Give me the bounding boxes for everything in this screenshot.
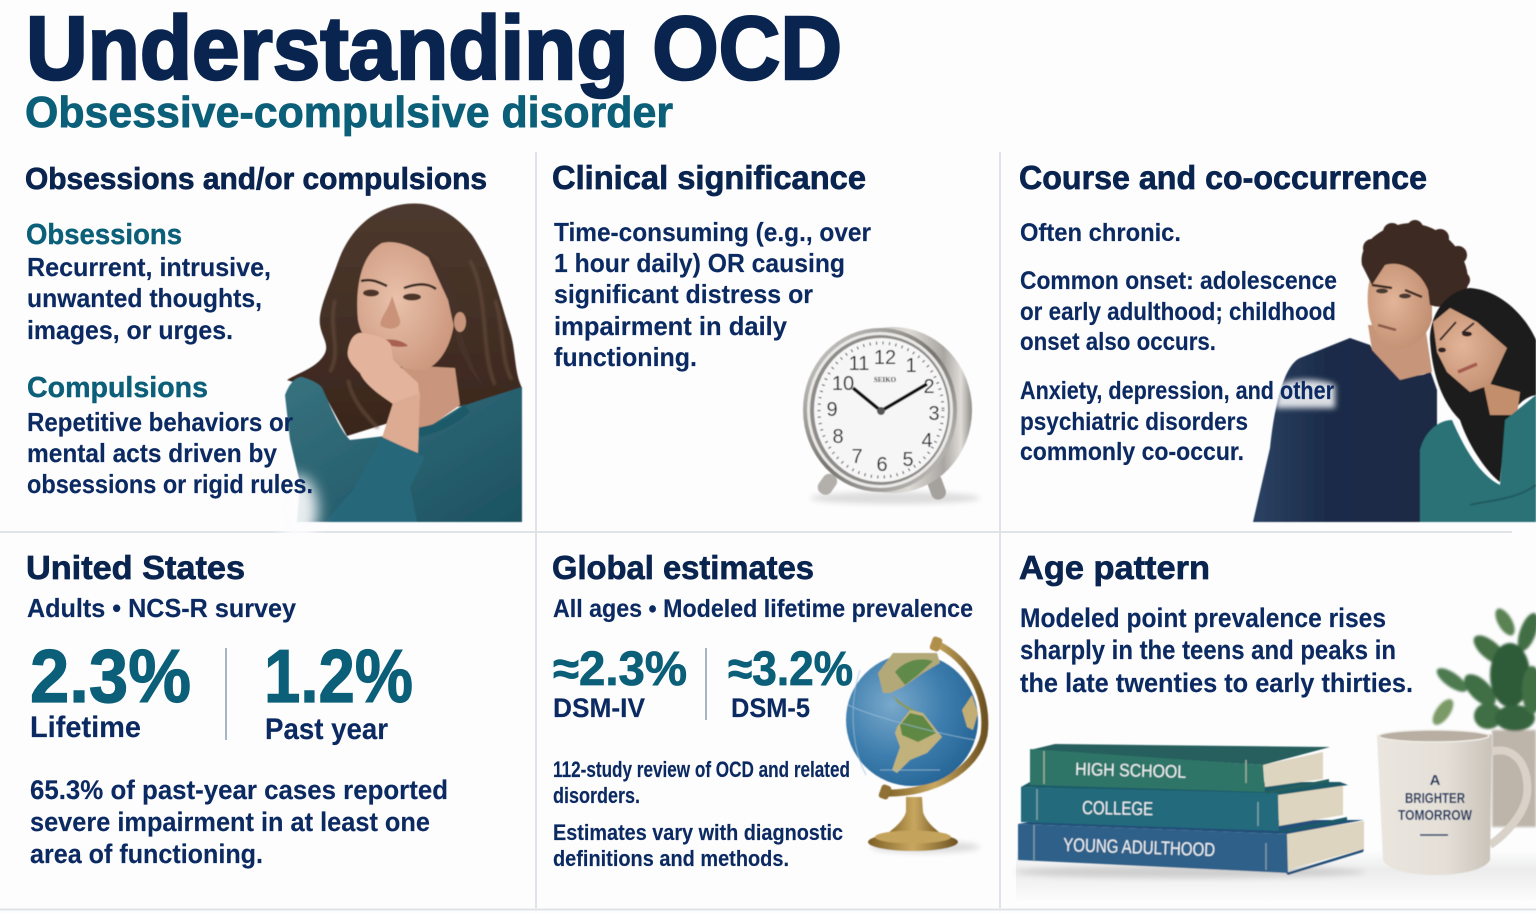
- stat: lifetime prevalence: 2.3%: [30, 634, 191, 718]
- icon: mug: [1377, 730, 1527, 875]
- text block: onset: Common onset: adolescence: [1020, 267, 1337, 295]
- heading: obsessions and compulsions: Obsessions and/or compulsions: [25, 161, 487, 196]
- icon: mug: BRIGHTER: [1405, 790, 1465, 807]
- text block: obsessions definition: Recurrent, intrusive,: [27, 252, 271, 282]
- icon: alarm clock: 6: [876, 454, 888, 476]
- text block: estimate caveat: Estimates vary with diagnostic: [553, 820, 843, 845]
- heading: age pattern: Age pattern: [1019, 549, 1210, 586]
- text block: compulsions definition: mental acts driven by: [27, 438, 277, 468]
- text block: clinical criteria: 1 hour daily) OR causing: [554, 248, 845, 278]
- icon: mug: A: [1430, 772, 1441, 789]
- icon: alarm clock: 8: [832, 426, 844, 448]
- book: young adulthood: YOUNG ADULTHOOD: [1063, 835, 1215, 861]
- icon: alarm clock: 5: [902, 449, 914, 471]
- book: college: [1021, 782, 1348, 833]
- heading: clinical significance: Clinical significance: [552, 159, 866, 196]
- subheading: prevalence type: All ages • Modeled lifetime prevalence: [553, 595, 973, 623]
- text block: compulsions definition: [27, 407, 313, 499]
- text block: obsessions definition: images, or urges.: [27, 315, 233, 345]
- book: young adulthood: [1018, 820, 1364, 875]
- text block: age prevalence: Modeled point prevalence rises: [1020, 603, 1386, 633]
- text block: study review: [553, 757, 850, 808]
- icon: alarm clock: 7: [851, 446, 863, 468]
- panel: global estimates: [552, 549, 985, 871]
- text block: age prevalence: [1020, 603, 1413, 698]
- icon: potted plant: [1429, 606, 1536, 827]
- stat: DSM-IV estimate: DSM-IV: [553, 693, 645, 723]
- text block: estimate caveat: definitions and methods.: [553, 846, 789, 871]
- label: compulsions: Compulsions: [27, 372, 208, 404]
- panel: course and co-occurrence: [1019, 159, 1536, 522]
- text block: chronic course: Often chronic.: [1020, 219, 1181, 247]
- icon: alarm clock: 11: [849, 353, 869, 375]
- panel: age pattern: [1015, 549, 1536, 900]
- stat: past-year prevalence: Past year: [265, 713, 388, 746]
- icon: stacked books: [1015, 744, 1365, 878]
- panel: clinical significance: [552, 159, 980, 504]
- text block: co-occurring disorders: commonly co-occur.: [1020, 438, 1244, 466]
- stat: DSM-IV estimate: ≈2.3%: [553, 643, 687, 696]
- label: obsessions: Obsessions: [26, 219, 182, 251]
- illustration: couple: [1253, 220, 1536, 522]
- icon: alarm clock: 4: [921, 430, 933, 452]
- stat: DSM-IV estimate: [553, 643, 687, 723]
- text block: compulsions definition: obsessions or rigid rules.: [27, 469, 313, 499]
- stat: past-year prevalence: 1.2%: [264, 634, 413, 718]
- heading: course and co-occurrence: Course and co-occurrence: [1019, 159, 1427, 196]
- text block: clinical criteria: significant distress or: [554, 279, 813, 309]
- icon: mug: TOMORROW: [1398, 807, 1473, 824]
- text block: estimate caveat: [553, 820, 843, 871]
- book: college: COLLEGE: [1082, 798, 1153, 820]
- text block: co-occurring disorders: [1020, 377, 1334, 466]
- icon: alarm clock: [803, 327, 980, 504]
- text block: clinical criteria: functioning.: [554, 342, 697, 372]
- table surface: [1016, 850, 1536, 900]
- panel: united states: [26, 549, 448, 869]
- stat: DSM-5 estimate: DSM-5: [731, 693, 810, 723]
- stat: past-year prevalence: [264, 634, 413, 746]
- text block: onset: [1020, 267, 1337, 356]
- heading: united states: United States: [26, 549, 245, 586]
- text block: impairment: [30, 775, 448, 869]
- illustration: worried woman: [278, 204, 522, 544]
- subheading: survey: Adults • NCS-R survey: [27, 593, 297, 623]
- icon: alarm clock: 9: [826, 399, 838, 421]
- text block: clinical criteria: [554, 217, 871, 372]
- text block: compulsions definition: Repetitive behaviors or: [27, 407, 293, 437]
- text block: impairment: area of functioning.: [30, 839, 263, 869]
- icon: alarm clock: 3: [928, 403, 940, 425]
- text block: impairment: severe impairment in at least one: [30, 807, 430, 837]
- stat: DSM-5 estimate: [728, 643, 853, 723]
- text block: age prevalence: sharply in the teens and peaks in: [1020, 635, 1396, 665]
- icon: alarm clock: 2: [923, 376, 935, 398]
- text block: study review: 112-study review of OCD and related: [553, 757, 850, 782]
- text block: obsessions definition: unwanted thoughts,: [27, 283, 262, 313]
- icon: alarm clock: 10: [832, 373, 854, 395]
- text block: clinical criteria: impairment in daily: [554, 311, 788, 341]
- icon: alarm clock: 1: [905, 355, 917, 377]
- title: Understanding OCD: [26, 0, 842, 99]
- book: high school: HIGH SCHOOL: [1075, 759, 1186, 782]
- text block: clinical criteria: Time-consuming (e.g., over: [554, 217, 871, 247]
- text block: study review: disorders.: [553, 783, 640, 808]
- text block: co-occurring disorders: psychiatric disorders: [1020, 408, 1248, 436]
- stat: lifetime prevalence: Lifetime: [30, 711, 141, 744]
- icon: globe: [846, 636, 985, 853]
- subtitle: Obsessive-compulsive disorder: [25, 88, 673, 137]
- text block: co-occurring disorders: Anxiety, depression, and other: [1020, 377, 1334, 405]
- text block: impairment: 65.3% of past-year cases reported: [30, 775, 448, 805]
- text block: onset: onset also occurs.: [1020, 328, 1216, 356]
- heading: global estimates: Global estimates: [552, 549, 814, 586]
- book: high school: [1030, 744, 1330, 794]
- icon: alarm clock: 12: [874, 347, 896, 369]
- stat: DSM-5 estimate: ≈3.2%: [728, 643, 853, 696]
- icon: alarm clock: SEIKO: [874, 376, 897, 384]
- text block: obsessions definition: [27, 252, 271, 345]
- text block: onset: or early adulthood; childhood: [1020, 298, 1336, 326]
- text block: age prevalence: the late twenties to early thirties.: [1020, 668, 1413, 698]
- panel: obsessions and compulsions: [25, 161, 522, 544]
